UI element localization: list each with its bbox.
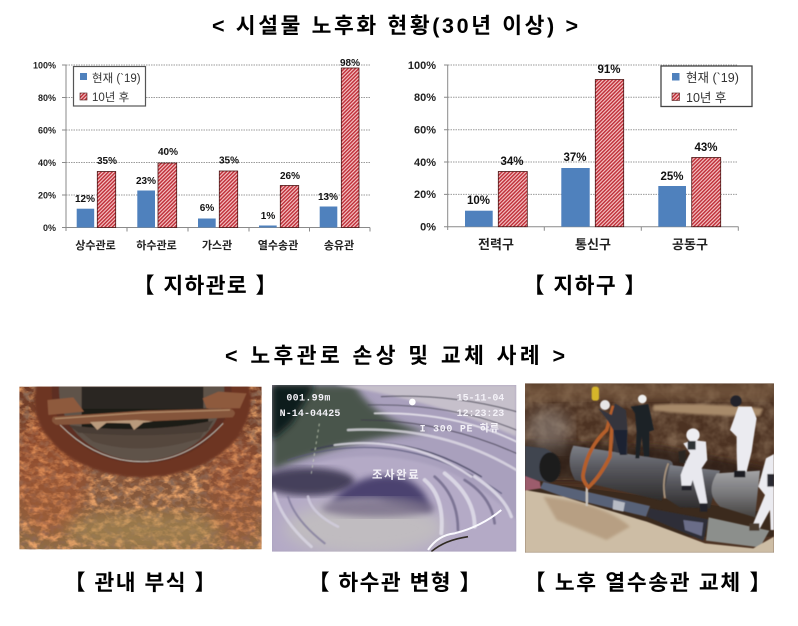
bar chart: underground pipelines [33,58,370,252]
value labels [75,58,360,222]
worker with sling [598,400,627,455]
value labels: 34% [500,156,524,168]
category labels: 열수송관 [258,238,298,252]
value labels: 12% [75,194,95,205]
category labels: 송유관 [324,239,354,252]
photo: deformed sewer pipe CCTV: 15-11-04 [457,393,504,404]
value labels: 6% [200,203,214,214]
value labels: 23% [136,176,156,187]
legend: 현재 (`19) [92,72,141,85]
value labels: 98% [340,58,360,69]
worker in white suit, centre [678,428,707,512]
value labels: 91% [597,64,621,76]
bars [465,80,721,227]
legend: 10년 후 [686,91,726,105]
photo: corroded pipe interior [19,386,262,550]
value labels: 40% [158,147,178,158]
caption: sewer deformation: 【 하수관 변형 】 [308,571,481,595]
y axis labels: 100% [33,60,56,70]
photo: replacing old heat transport pipe [525,383,774,553]
value labels: 26% [280,171,300,182]
legend: 현재 (`19) [686,71,739,85]
photo: deformed sewer pipe CCTV: 조사완료 [372,468,419,482]
value labels: 10% [467,195,490,207]
legend [661,66,752,106]
category labels [75,238,354,252]
y axis labels: 40% [38,158,56,168]
bars [77,68,359,228]
category labels: 가스관 [202,238,232,252]
heading: damage and replacement cases: < 노후관로 손상 및 교체 사례 > [225,344,565,368]
worker in black jacket [631,395,654,458]
bar chart: utility tunnels [408,60,752,252]
y axis labels: 60% [38,126,56,136]
value labels: 13% [318,192,338,203]
y axis labels: 0% [420,222,436,234]
y axis labels: 40% [414,157,436,169]
caption: utility tunnels: 【 지하구 】 [523,274,646,298]
photo: deformed sewer pipe CCTV [261,385,516,555]
caption: underground pipelines: 【 지하관로 】 [133,274,277,298]
y axis labels: 80% [38,93,56,103]
photo: deformed sewer pipe CCTV: 12:23:23 [457,408,504,419]
value labels: 43% [694,142,718,154]
photo: deformed sewer pipe CCTV: I 300 PE 하류 [420,422,499,435]
value labels [467,64,718,207]
category labels [478,237,708,252]
category labels: 통신구 [575,237,611,252]
y axis labels: 20% [38,190,56,200]
y axis labels: 80% [414,92,436,104]
category labels: 하수관로 [136,239,177,252]
title: facility aging status: < 시설물 노후화 현황(30년 이상) > [212,14,578,38]
value labels: 35% [97,156,117,167]
value labels: 25% [660,171,684,183]
legend [74,66,146,106]
category labels: 공동구 [672,237,708,252]
category labels: 전력구 [478,237,514,252]
worker in white suit, right [730,395,757,477]
value labels: 1% [261,211,275,222]
y axis labels: 0% [43,223,56,233]
photo: deformed sewer pipe CCTV: N-14-04425 [280,408,340,419]
photo: deformed sewer pipe CCTV: 001.99m [286,393,330,404]
category labels: 상수관로 [75,239,116,252]
y axis labels [33,60,56,233]
caption: old heat pipe replacement: 【 노후 열수송관 교체 】 [524,571,771,595]
value labels: 37% [563,152,587,164]
y axis labels: 100% [408,60,436,72]
y axis labels: 20% [414,189,436,201]
y axis labels: 60% [414,124,436,136]
worker in white suit, foreground [749,454,774,531]
legend: 10년 후 [92,91,129,104]
caption: corrosion in pipe: 【 관내 부식 】 [64,571,216,595]
y axis labels [408,60,436,234]
value labels: 35% [219,156,239,166]
